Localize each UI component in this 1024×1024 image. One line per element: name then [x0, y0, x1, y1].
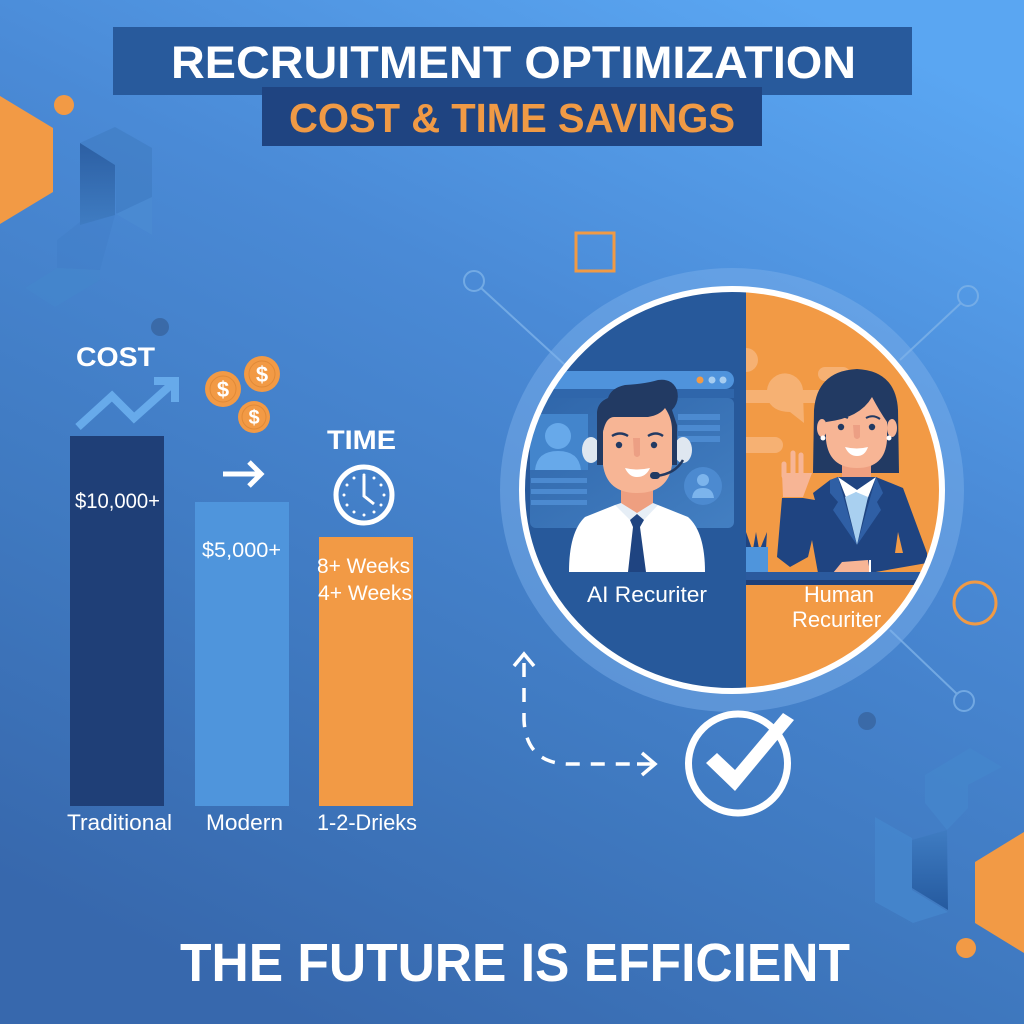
decoration: bottom-right shapes — [875, 748, 1024, 958]
icon: clock — [336, 467, 392, 523]
bar labels: Traditional — [67, 810, 172, 835]
circle halo — [500, 268, 964, 712]
bar labels — [67, 810, 417, 835]
recruiter circle panel — [510, 280, 956, 700]
bar: time: 8+ Weeks — [317, 555, 410, 578]
label: AI recruiter: AI Recuriter — [587, 582, 707, 607]
man: recruiter with headset — [569, 380, 705, 572]
bar: time — [317, 537, 413, 806]
icon: check circle — [688, 713, 794, 813]
bar labels: Modern — [206, 810, 283, 835]
decoration: top-left shapes — [0, 95, 152, 307]
icon: dollar coins: $ — [217, 377, 229, 402]
cost heading: COST — [76, 342, 156, 372]
bar: modern — [195, 502, 289, 806]
bar: traditional — [70, 436, 164, 806]
time heading: TIME — [327, 425, 396, 455]
label: human recruiter — [794, 586, 881, 627]
panel: AI recruiter side — [525, 292, 746, 688]
icon: dollar coins: $ — [256, 362, 268, 387]
bar: traditional: $10,000+ — [75, 490, 160, 513]
raised hand — [782, 453, 812, 497]
icon: pencil cup — [746, 532, 768, 573]
title banner — [113, 27, 912, 95]
label: human recruiter: Recuriter — [792, 607, 881, 632]
network connectors — [464, 271, 978, 711]
icon: right arrow — [223, 462, 261, 486]
panel: human recruiter side — [746, 292, 939, 688]
icon: dollar coins: $ — [248, 407, 260, 429]
woman: recruiter waving — [777, 369, 927, 573]
desk — [746, 572, 920, 585]
dashed flow arrow — [514, 654, 655, 775]
bar: modern: $5,000+ — [202, 539, 281, 562]
icon: rising trend arrow — [78, 381, 175, 427]
bar: time: 4+ Weeks — [318, 582, 412, 605]
bar labels: 1-2-Drieks — [317, 810, 417, 835]
decorative orange ring — [954, 582, 996, 624]
subtitle banner: COST & TIME SAVINGS — [289, 95, 735, 141]
decorative orange square — [576, 233, 614, 271]
small dark dot — [151, 318, 169, 336]
label: human recruiter: Human — [804, 582, 874, 607]
icon: dollar coins — [205, 356, 280, 433]
title banner: RECRUITMENT OPTIMIZATION — [171, 37, 856, 88]
closing headline: THE FUTURE IS EFFICIENT — [180, 933, 850, 993]
small dark dot right — [858, 712, 876, 730]
